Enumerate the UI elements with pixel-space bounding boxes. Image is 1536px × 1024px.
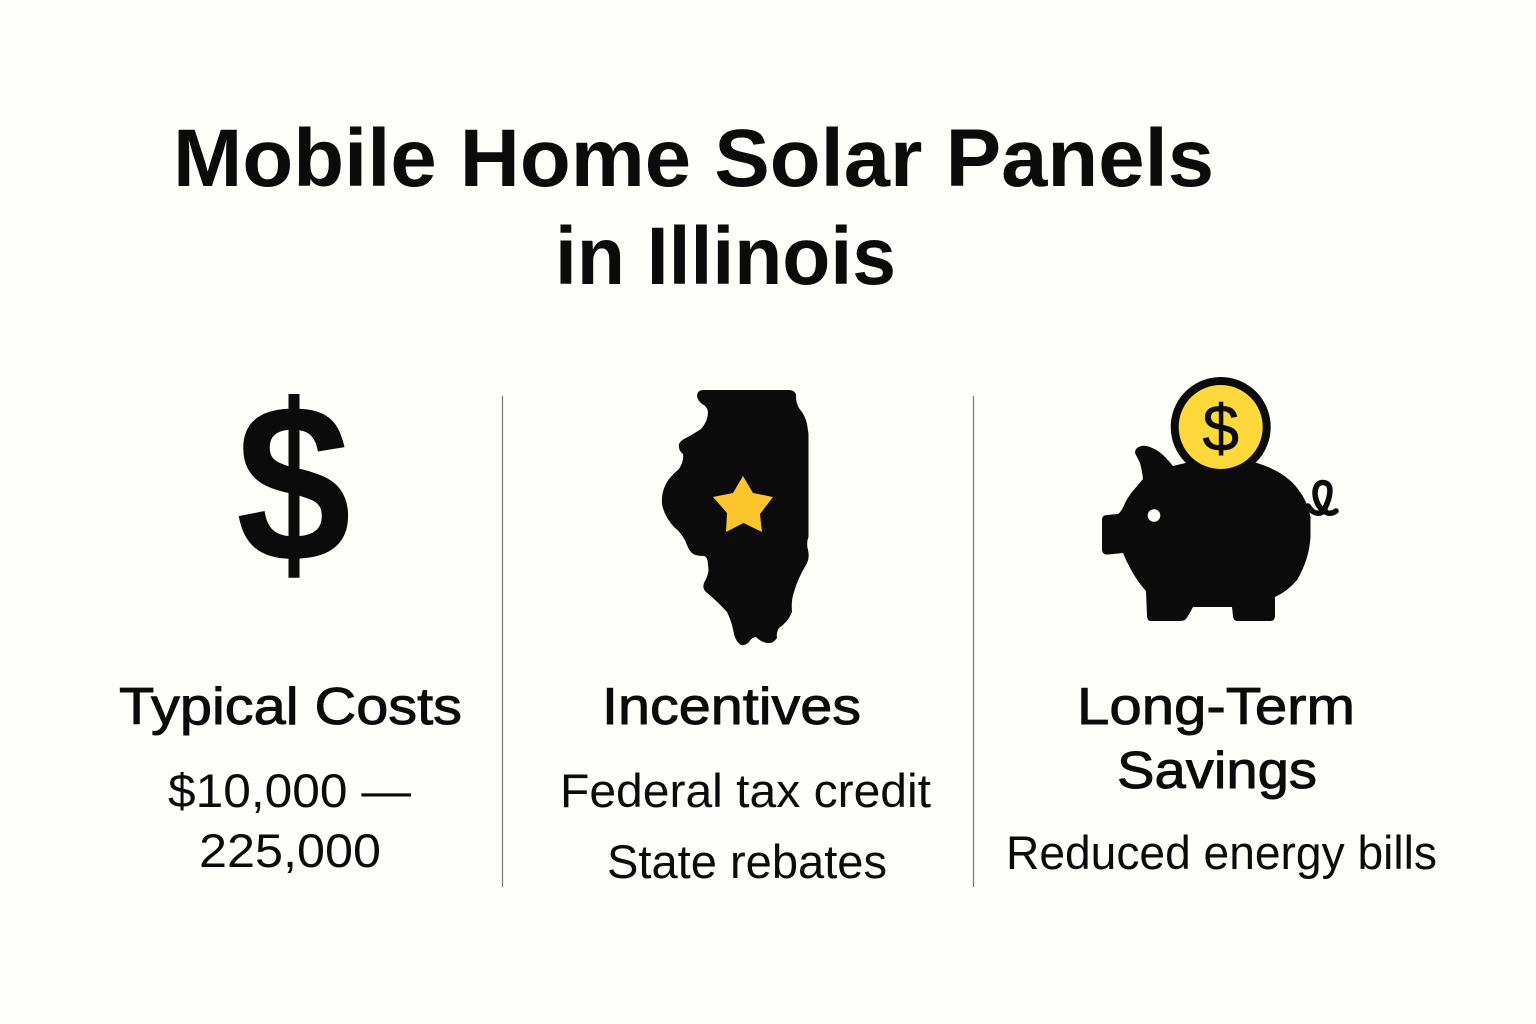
heading: long-term savings: Long-Term <box>1077 678 1355 736</box>
heading: incentives: Incentives <box>602 678 861 736</box>
cost range text: $10,000 — <box>168 764 411 817</box>
savings: reduced energy bills: Reduced energy bills <box>1006 826 1437 879</box>
panel: incentives <box>560 390 931 888</box>
heading: typical costs: Typical Costs <box>119 678 462 736</box>
incentive: state rebates: State rebates <box>607 835 887 888</box>
icon: piggy bank with coin <box>1102 381 1336 621</box>
panel: typical costs <box>119 357 462 877</box>
heading: long-term savings: Savings <box>1117 742 1317 800</box>
icon: piggy bank with coin: $ <box>1202 391 1239 465</box>
title <box>173 113 1214 302</box>
icon: dollar sign: $ <box>236 357 351 609</box>
icon: Illinois map with star <box>662 390 809 645</box>
cost range text <box>168 764 411 877</box>
title: in Illinois <box>555 211 896 302</box>
cost range text: 225,000 <box>199 824 381 877</box>
panel: long-term savings <box>1006 381 1437 879</box>
incentive: federal tax credit: Federal tax credit <box>560 764 931 817</box>
heading: long-term savings <box>1077 678 1355 800</box>
title: Mobile Home Solar Panels <box>173 113 1214 204</box>
